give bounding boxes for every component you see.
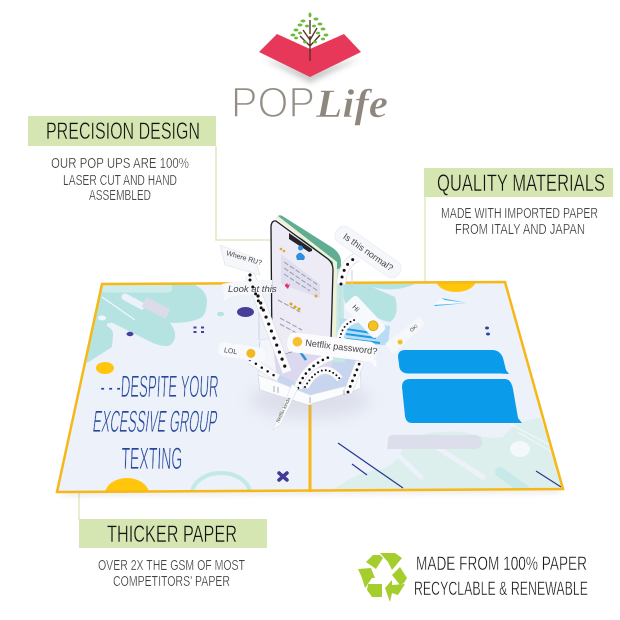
long strip bubble on floor <box>273 384 298 430</box>
teal phone stand panel <box>332 262 345 362</box>
phone notch <box>289 233 312 252</box>
thicker paper heading bar <box>79 519 267 548</box>
thicker paper body: OVER 2X THE GSM OF MOST <box>98 557 245 574</box>
right page paper plane <box>434 298 467 306</box>
logo: Life wordmark: Life <box>315 81 388 126</box>
card text: TEXTING <box>121 441 183 476</box>
left page light teal top band <box>105 284 168 292</box>
wall arrow marks <box>274 386 344 403</box>
bubble: Look at this: Look at this <box>228 284 277 295</box>
bubble: Ok <box>385 317 428 354</box>
ribbon: Where R U <box>250 275 287 372</box>
precision design body <box>51 155 189 204</box>
logo: POP wordmark: POP <box>231 79 315 127</box>
card centre fold <box>308 405 312 492</box>
bubble: Ok: OK! <box>409 324 419 334</box>
open card: EXCESSIVE GROUP <box>91 404 219 439</box>
logo: Pop Life <box>231 12 388 127</box>
right page lower pale stripes <box>400 448 483 477</box>
card artwork <box>86 283 561 490</box>
pop-up shadow <box>250 382 370 418</box>
callout: quality materials <box>424 168 613 238</box>
precision design heading bar <box>28 116 216 146</box>
right page top teal shapes <box>340 284 415 322</box>
card text <box>91 369 219 476</box>
bubble: LOL: LOL <box>223 347 238 356</box>
left page x mark <box>279 473 287 480</box>
right page lower teal shapes <box>333 418 570 492</box>
icon: recycling symbol <box>358 553 407 602</box>
ribbon: Netflix <box>298 356 332 388</box>
right page white hairlines <box>514 426 552 452</box>
base side wall <box>258 338 278 382</box>
right page blue message bubble two <box>402 379 522 423</box>
phone back <box>278 215 341 270</box>
right page darker teal stripe <box>500 472 525 490</box>
left page white stripe <box>102 297 135 320</box>
ribbon: right <box>348 362 360 392</box>
phone chat lines <box>278 262 318 335</box>
phone front <box>271 221 333 358</box>
clear support rods <box>259 270 352 345</box>
precision design body: ASSEMBLED <box>89 187 151 204</box>
thicker paper heading: THICKER PAPER <box>107 521 237 548</box>
open card: - - -DESPITE YOUR <box>100 369 219 404</box>
phone cream edge <box>275 216 337 345</box>
open card <box>56 280 565 494</box>
precision design body: OUR POP UPS ARE 100% <box>51 155 189 172</box>
base inner floor <box>258 340 360 395</box>
ribbon: LOL <box>250 360 278 378</box>
left page pale stripe <box>125 297 142 306</box>
pop-up phone scene <box>217 215 428 430</box>
bubble: Where R U <box>220 245 263 275</box>
quality materials heading bar <box>424 168 613 197</box>
callout: thicker paper <box>79 519 267 590</box>
ribbon: Hi <box>340 319 358 338</box>
logo: red open book chevron <box>259 34 361 77</box>
bubble: Hi <box>343 294 387 340</box>
left page bottom teal ring <box>190 471 252 490</box>
precision design heading: PRECISION DESIGN <box>46 118 200 145</box>
right page dots <box>485 326 490 336</box>
thicker paper body: COMPETITORS' PAPER <box>113 573 230 590</box>
right page navy lines <box>338 443 561 488</box>
recycling claim text <box>414 554 588 600</box>
left page bottom yellow semicircle <box>106 478 148 490</box>
logo: tree <box>290 12 328 61</box>
right page blue message bubble one <box>398 350 509 374</box>
quality materials body <box>441 205 598 238</box>
ribbon: Is this normal <box>341 257 358 284</box>
blue fan stripes <box>346 329 380 343</box>
card yellow border <box>57 282 563 492</box>
ribbon top over Look at this <box>250 280 262 310</box>
left page dots <box>96 307 254 374</box>
bubble: Hi: Hi <box>350 304 360 314</box>
phone lower panel <box>272 340 332 385</box>
bubble: LOL <box>217 341 267 363</box>
card page background <box>57 282 563 492</box>
bubble: Is this normal <box>332 223 404 281</box>
left page grey stripe <box>144 302 168 314</box>
phone emojis <box>280 248 318 310</box>
callout: precision design <box>28 116 216 204</box>
blue stripe under phone <box>296 346 306 360</box>
thicker paper body <box>98 557 245 590</box>
card shadow <box>60 487 560 496</box>
bubble: Netflix password: Netflix password? <box>305 338 378 357</box>
phone chat panel <box>281 254 320 298</box>
bubble: Where R U: Where RU? <box>225 250 263 267</box>
bubble: Look at this <box>222 280 277 301</box>
left page teal shapes <box>80 284 207 363</box>
leader lines <box>79 146 425 520</box>
ribbon: inner arc <box>305 370 340 387</box>
bubble: Netflix password <box>286 332 379 367</box>
right page white circle <box>510 441 530 457</box>
right page grey message bubble <box>387 435 482 449</box>
base white front walls <box>258 358 361 405</box>
right page top yellow semicircle <box>436 283 476 292</box>
phone contact avatar <box>296 246 305 260</box>
long strip bubble on floor: Netflix kinda <box>275 396 292 424</box>
blue fan panel <box>340 318 390 345</box>
precision design body: LASER CUT AND HAND <box>63 172 177 189</box>
bubble: Is this normal: Is this normal? <box>341 231 395 273</box>
logo shadow <box>262 58 361 83</box>
